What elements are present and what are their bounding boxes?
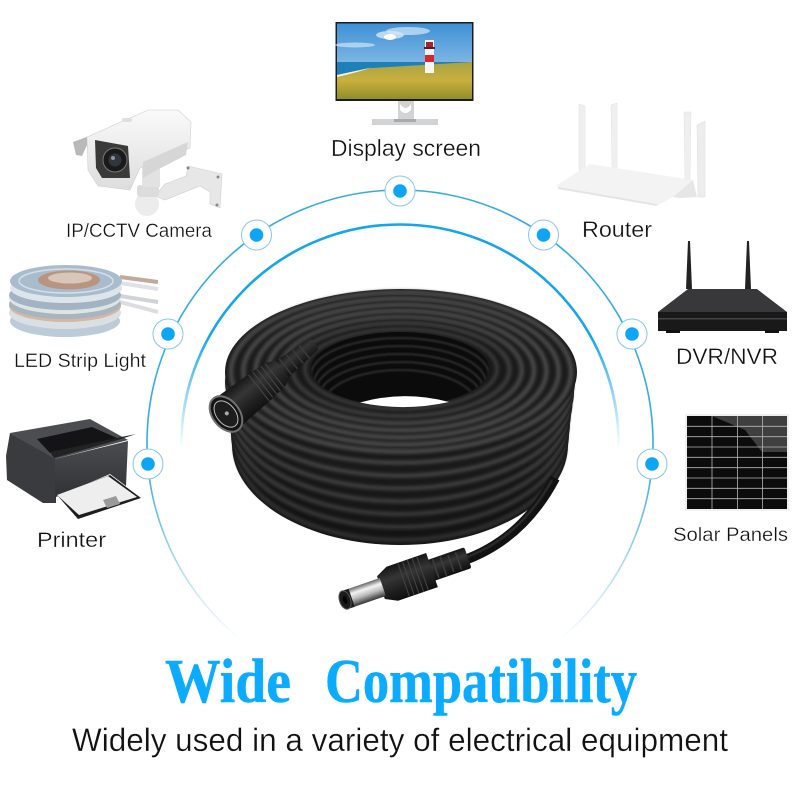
node: DVR	[617, 319, 647, 349]
label: DVR/NVR: DVR/NVR	[676, 344, 778, 369]
label: Display screen: Display screen	[331, 135, 481, 161]
label: IP/CCTV Camera: IP/CCTV Camera	[66, 220, 212, 242]
white opening	[360, 396, 449, 407]
cable coil	[203, 289, 577, 619]
subtitle: Widely used in a variety of electrical equipment	[72, 722, 728, 758]
title: Wide Compatibility	[165, 648, 637, 716]
label: LED Strip Light: LED Strip Light	[14, 350, 147, 372]
device: LED strip light	[9, 265, 158, 372]
label: Router: Router	[582, 217, 653, 242]
icon: LED strip reel	[9, 265, 158, 337]
device: DVR/NVR	[658, 241, 787, 369]
node: solar	[637, 449, 667, 479]
node: router	[528, 220, 558, 250]
icon: router	[557, 103, 705, 206]
node: printer	[133, 449, 163, 479]
label: Printer: Printer	[37, 528, 106, 552]
male DC connector	[334, 541, 474, 619]
device: router	[557, 103, 705, 242]
coil centre hole	[312, 332, 488, 408]
node: camera	[242, 220, 272, 250]
device: solar panels	[673, 414, 789, 546]
inner arc	[182, 224, 618, 662]
node: display screen	[385, 176, 415, 206]
icon: DVR recorder	[658, 241, 787, 333]
coil side layers	[225, 297, 575, 545]
icon: solar panel	[685, 414, 789, 511]
device: IP/CCTV camera	[66, 110, 222, 242]
coil top rings	[225, 289, 577, 455]
female connector	[203, 327, 328, 438]
title: Wide Compatibility: Wide	[165, 648, 291, 716]
title: Wide Compatibility: Compatibility	[325, 648, 637, 716]
device: display screen	[331, 22, 481, 161]
label: Solar Panels: Solar Panels	[673, 524, 788, 546]
icon: printer	[6, 419, 141, 519]
icon: camera	[73, 110, 222, 216]
node: LED strip	[153, 319, 183, 349]
device: printer	[6, 419, 141, 552]
output cable	[462, 478, 555, 561]
icon: monitor	[335, 22, 474, 125]
outer arc with nodes	[133, 176, 667, 696]
